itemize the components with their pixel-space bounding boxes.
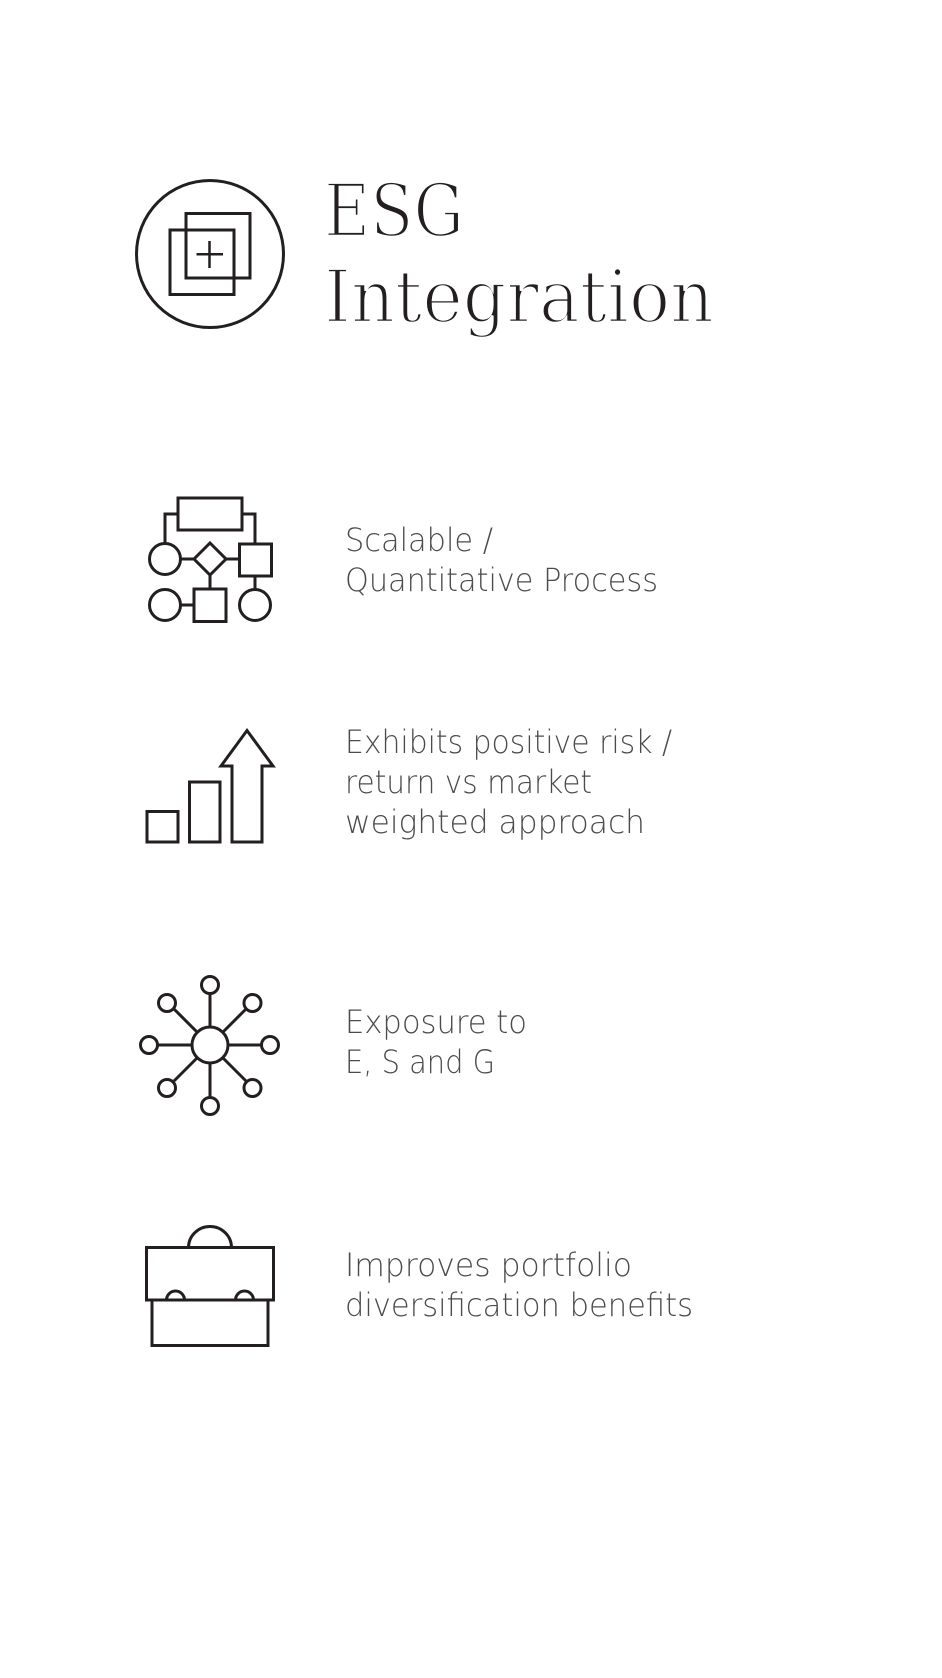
title: [324, 169, 714, 340]
text: exposure: Exposure to: [345, 1003, 527, 1041]
title: ESG: [324, 169, 464, 254]
text: scalable process: Scalable /: [345, 521, 493, 559]
text: diversification: diversification benefits: [345, 1286, 693, 1324]
text: positive risk / return: return vs market: [345, 763, 592, 801]
text: diversification: Improves portfolio: [345, 1246, 632, 1284]
text: positive risk / return: Exhibits positive risk /: [345, 723, 672, 761]
icon: process flow chart: [150, 498, 272, 622]
text: positive risk / return: weighted approach: [345, 803, 645, 841]
icon: rising bars and arrow: [147, 730, 273, 842]
text: diversification: [345, 1246, 693, 1324]
icon: briefcase: [146, 1226, 274, 1346]
text: scalable process: Quantitative Process: [345, 561, 658, 599]
text: scalable process: [345, 521, 658, 599]
text: positive risk / return: [345, 723, 672, 841]
text: exposure: [345, 1003, 527, 1081]
title: Integration: [324, 255, 714, 340]
text: exposure: E, S and G: [345, 1043, 495, 1081]
icon: hub and spokes: [140, 976, 278, 1114]
header icon: overlapping squares with plus in circle: [136, 180, 284, 328]
